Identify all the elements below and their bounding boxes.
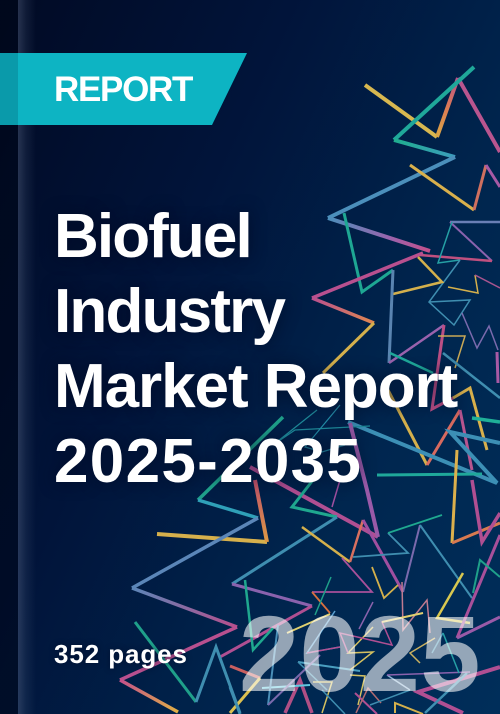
book spine: [0, 0, 40, 714]
year watermark: 2025: [239, 593, 481, 714]
lower triangles: [120, 423, 500, 712]
report ribbon: [0, 53, 247, 125]
upper triangles: [328, 67, 500, 325]
page count: 352 pages: [54, 639, 188, 669]
title: 2025-2035: [54, 427, 362, 496]
title: Industry: [54, 277, 284, 346]
bottom triangles: [135, 622, 500, 714]
middle triangles: [198, 253, 500, 543]
report ribbon: REPORT: [54, 70, 192, 109]
title: Biofuel: [54, 202, 251, 271]
title: Market Report: [54, 352, 457, 421]
title: [54, 202, 465, 496]
small lines behind the year: [230, 602, 470, 714]
